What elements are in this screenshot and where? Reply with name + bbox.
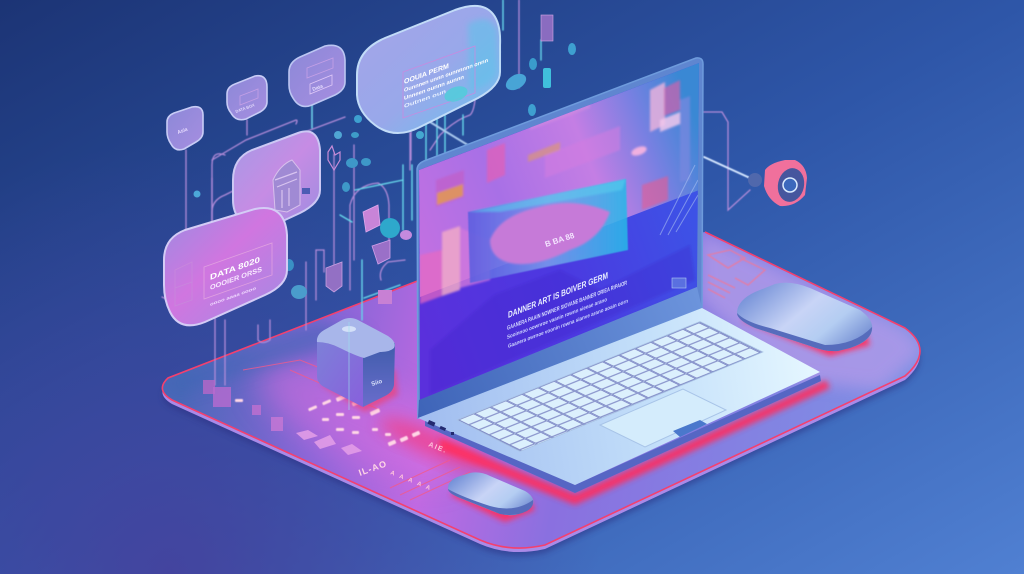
screen heading and body text: DANNER ART IS BOIVER GERM — [508, 270, 608, 320]
bubble: lower left pink: DATA 8020 — [210, 255, 260, 282]
small pod — [448, 472, 535, 522]
cube device — [317, 318, 398, 412]
small wire nodes — [194, 15, 576, 431]
wires and connectors — [162, 0, 750, 385]
icon: connector ball — [748, 173, 762, 187]
bubble: lower left pink: oooo aaaa oooo — [210, 285, 256, 307]
bubble: small far left: Asia — [177, 127, 189, 136]
cube device: Siio — [371, 379, 383, 388]
platform circuit marks: A A A A A — [389, 470, 433, 493]
bubble: large top: Ounnnen unnn ounnnnnn onnn — [404, 58, 489, 94]
screen display: Gaanera owrnoe voonin rowna sianve arano aoain oorn — [508, 298, 628, 350]
platform circuit marks: AIE. — [427, 441, 448, 455]
laptop screen — [415, 58, 705, 418]
bubble: large top — [357, 6, 500, 133]
front notch — [673, 420, 707, 437]
bubble: large top: OOUIA PERM — [404, 61, 449, 86]
platform circuit marks: IL-AO — [357, 458, 388, 478]
icon: ring device — [748, 160, 807, 206]
screen display: GAANERA RAAIN NOWNER SIOVANE BANNER ORIEA RIPAIOR — [507, 279, 627, 332]
centre window panel: B BA 88 — [544, 231, 576, 249]
screen display: Sooinnoo oownroe vaanin rownn sieeae arano — [507, 297, 607, 341]
deck — [418, 308, 820, 485]
bubble: large top: Outnen oun — [404, 89, 447, 110]
bubble: portrait — [233, 131, 320, 228]
centre window panel — [468, 179, 628, 283]
side ports — [427, 420, 454, 435]
screen lid frame — [417, 58, 703, 418]
bubble: large top: Unneen ounnn aunnn — [404, 74, 465, 102]
base front edge — [425, 375, 821, 493]
bubble: lower left pink: OOOIER ORSS — [210, 264, 262, 292]
bubble: medium third — [289, 45, 345, 106]
platform: glowing tray — [162, 232, 925, 556]
bubble: small far left — [167, 107, 203, 150]
right pod — [737, 283, 872, 356]
trackpad — [600, 389, 726, 447]
keyboard — [458, 322, 762, 451]
platform circuit marks — [235, 250, 765, 500]
bubble: medium third: Data — [312, 83, 324, 93]
laptop base — [418, 287, 821, 493]
screen display — [415, 60, 705, 405]
bubble: small second — [227, 76, 267, 120]
bubble: small second: DATA BOX — [235, 102, 256, 114]
bubble: lower left pink — [164, 208, 287, 325]
hinge bar — [418, 287, 702, 418]
